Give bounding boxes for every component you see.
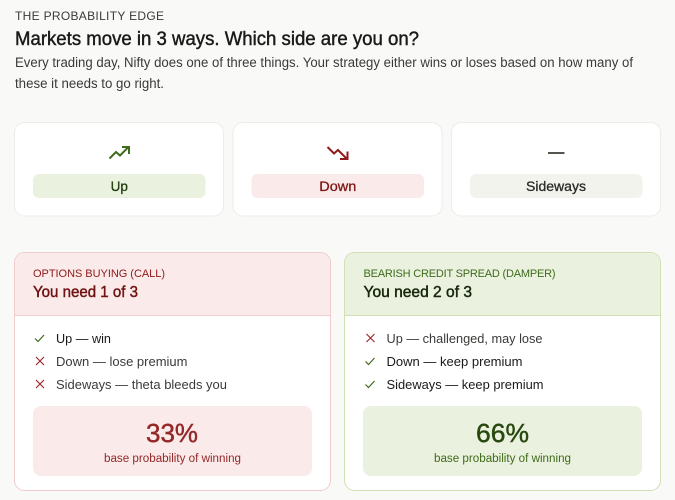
stat: 33% <box>33 406 312 476</box>
list: outcomes: Sideways — theta bleeds you <box>56 377 227 392</box>
icon: trending up arrow <box>110 147 129 158</box>
pill: down: Down <box>319 179 356 194</box>
stat: 33%: 33% <box>146 418 198 448</box>
header block <box>15 9 633 91</box>
intro text: Every trading day, Nifty does one of three things. Your strategy either wins or loses based on how many of <box>15 55 633 70</box>
list: outcomes: Sideways — keep premium <box>386 377 544 392</box>
eyebrow: THE PROBABILITY EDGE <box>15 9 164 23</box>
icon: cross <box>36 357 44 365</box>
panel: up card <box>14 122 224 216</box>
list: outcomes: Up — win <box>56 331 111 346</box>
panel header: options buying: OPTIONS BUYING (CALL) <box>33 268 165 280</box>
stat: 66%: 66% <box>476 418 529 448</box>
panel: bearish credit spread <box>344 252 660 490</box>
stat: 66% <box>363 406 642 476</box>
panel: down card <box>233 122 442 216</box>
pill: up <box>33 174 206 198</box>
panel header: options buying: You need 1 of 3 <box>33 284 138 301</box>
stat: 66%: base probability of winning <box>434 453 571 465</box>
pill: up: Up <box>111 179 128 194</box>
title: Markets move in 3 ways. Which side are you on? <box>15 28 419 50</box>
icon: check <box>366 358 374 364</box>
icon: check <box>35 335 44 342</box>
list: outcomes: Down — lose premium <box>56 354 188 369</box>
panel header: bearish credit spread: You need 2 of 3 <box>364 284 472 301</box>
icon: trending down arrow <box>328 147 348 159</box>
pill: sideways <box>470 174 642 198</box>
icon: flat dash <box>548 152 564 154</box>
icon: cross <box>366 334 374 342</box>
pill: down <box>252 174 424 198</box>
intro text <box>15 55 633 91</box>
list: outcomes: Down — keep premium <box>386 354 522 369</box>
pill: sideways: Sideways <box>526 179 586 194</box>
list: outcomes <box>366 331 544 392</box>
panel: options buying <box>14 252 330 490</box>
intro text: these it needs to go right. <box>15 76 164 91</box>
panel: sideways card <box>452 122 660 216</box>
panel header: bearish credit spread <box>345 253 660 316</box>
panel header: bearish credit spread: BEARISH CREDIT SPREAD (DAMPER) <box>364 268 556 280</box>
icon: check <box>366 381 374 388</box>
list: outcomes <box>35 331 227 392</box>
stat: 33%: base probability of winning <box>104 453 241 465</box>
list: outcomes: Up — challenged, may lose <box>386 331 542 346</box>
icon: cross <box>36 380 44 388</box>
panel header: options buying <box>15 253 330 316</box>
